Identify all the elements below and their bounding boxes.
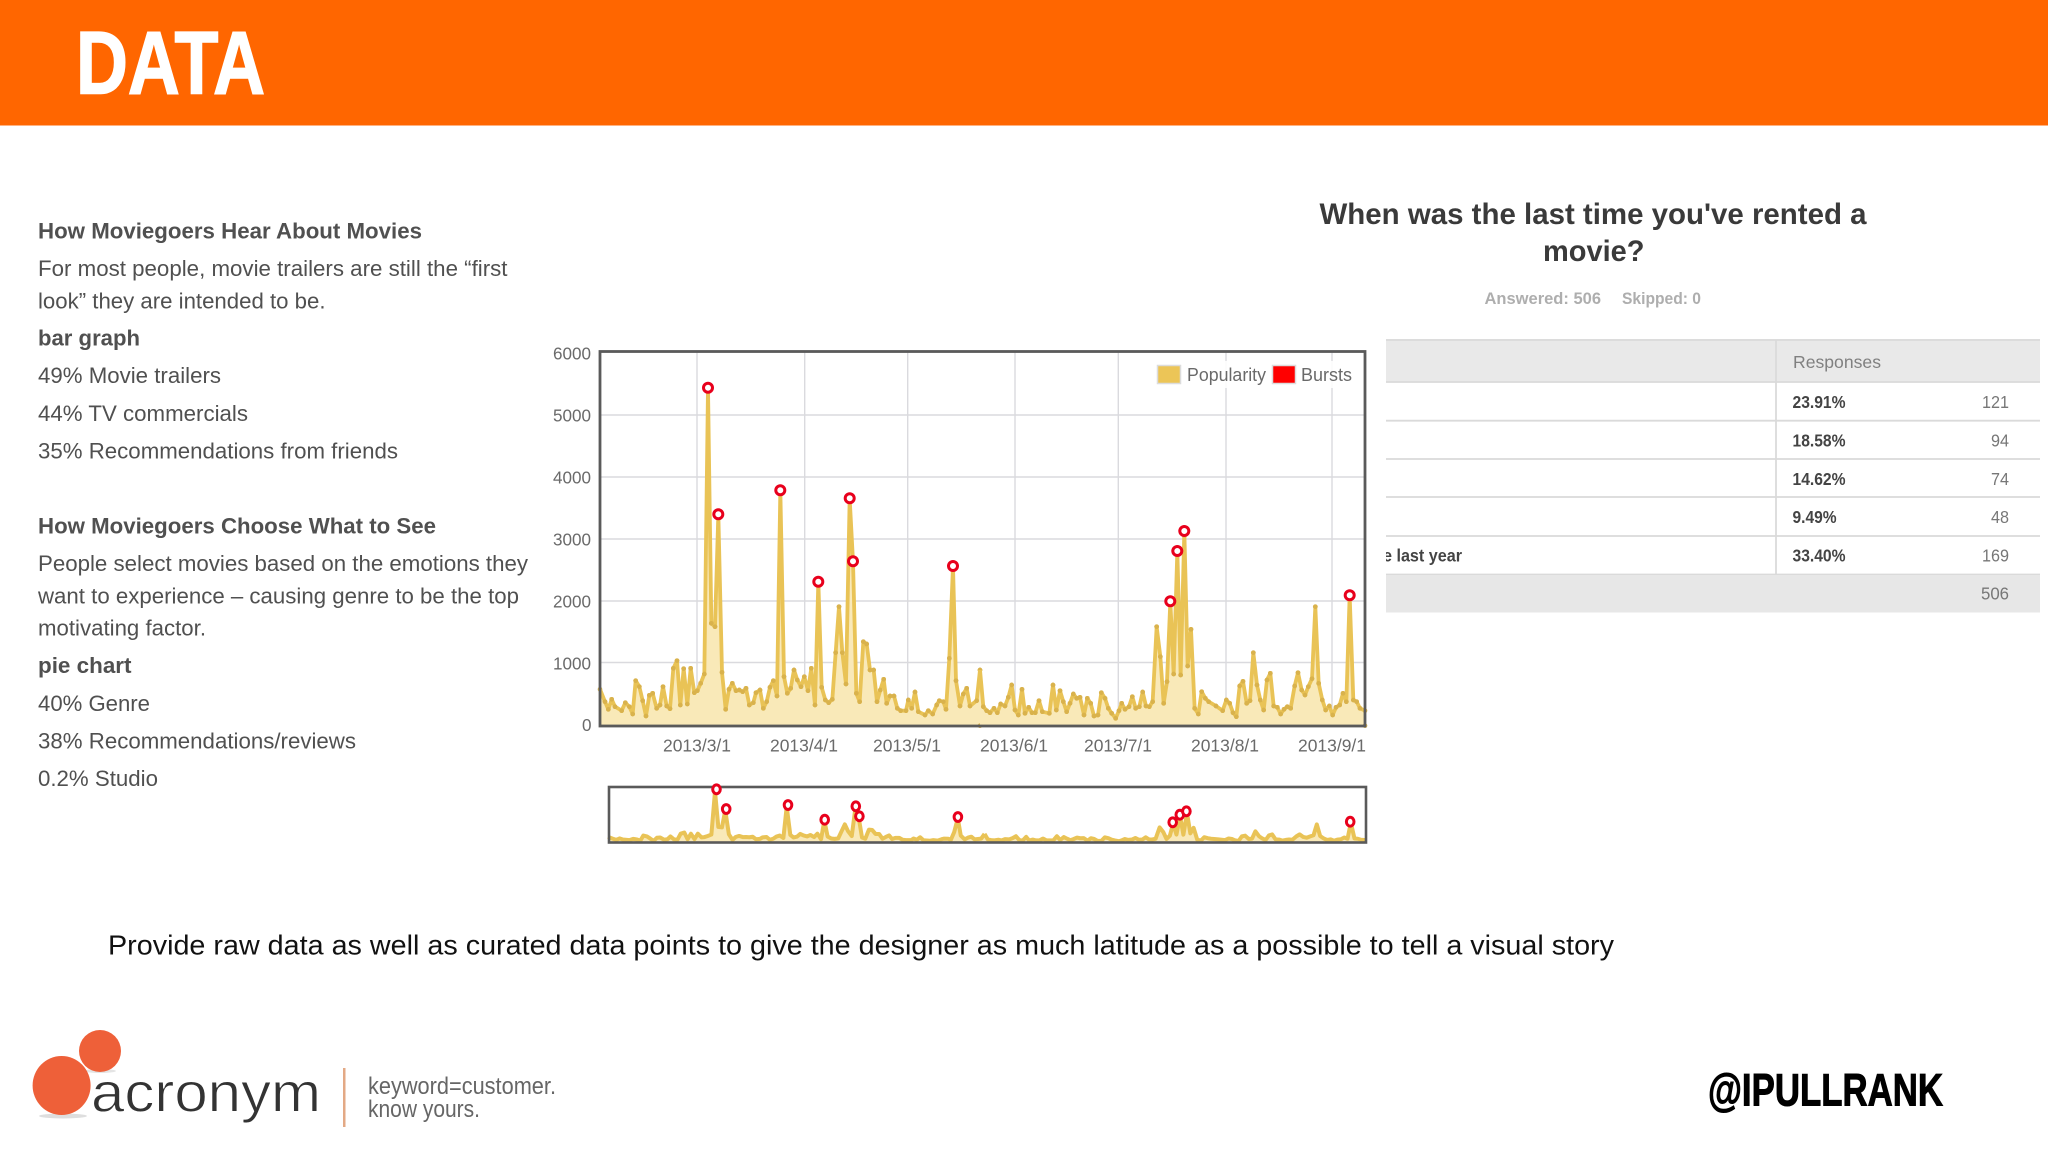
legend: Popularity bbox=[1187, 365, 1266, 385]
survey question heading: movie? bbox=[1543, 235, 1644, 268]
table row 3: 14.62% bbox=[1792, 469, 1846, 489]
table header row bbox=[1386, 339, 2040, 382]
bar graph data points: 35% Recommendations from friends bbox=[38, 438, 398, 464]
table row 5: e last year bbox=[1383, 546, 1462, 566]
survey answered and skipped counts bbox=[1484, 289, 1701, 308]
y axis labels: 2000 bbox=[553, 592, 591, 612]
overview frame bbox=[609, 787, 1366, 842]
overview burst markers bbox=[713, 785, 1354, 827]
pie chart data points: 0.2% Studio bbox=[38, 766, 158, 791]
table row 2: 18.58% bbox=[1792, 431, 1846, 451]
table footer row: 506 bbox=[1981, 584, 2009, 604]
description: motivating factor. bbox=[38, 616, 206, 641]
chart frame bbox=[600, 352, 1365, 726]
description: want to experience – causing genre to be the top bbox=[37, 583, 519, 608]
twitter handle: @IPULLRANK bbox=[1708, 1065, 1943, 1116]
logo wordmark: acronym bbox=[91, 1061, 321, 1124]
survey responses table bbox=[1383, 339, 2040, 612]
pie chart data points bbox=[38, 691, 356, 791]
x axis labels: 2013/3/1 bbox=[663, 736, 731, 756]
x axis labels: 2013/9/1 bbox=[1298, 736, 1366, 756]
table row 2: 94 bbox=[1991, 431, 2009, 451]
logo divider bbox=[343, 1068, 346, 1127]
line chart: popularity and bursts bbox=[553, 344, 1366, 756]
heading: How Moviegoers Hear About Movies bbox=[38, 218, 422, 244]
overview range chart bbox=[608, 785, 1366, 843]
title: DATA bbox=[76, 12, 265, 112]
heading: How Moviegoers Choose What to See bbox=[38, 514, 436, 538]
legend: Bursts bbox=[1301, 365, 1352, 385]
pie chart data points: 40% Genre bbox=[38, 691, 150, 716]
y axis labels: 1000 bbox=[553, 654, 591, 674]
acronym logo bbox=[33, 1030, 556, 1127]
logo tagline: keyword=customer. bbox=[368, 1073, 556, 1100]
table row 5: 33.40% bbox=[1792, 546, 1846, 566]
table row 1: 23.91% bbox=[1792, 392, 1846, 412]
description bbox=[38, 256, 508, 314]
panel: how moviegoers choose what to see bbox=[37, 514, 529, 791]
table row 5 bbox=[1386, 548, 2008, 565]
description: For most people, movie trailers are still the “first bbox=[38, 256, 508, 281]
table row 1 bbox=[1793, 396, 2008, 408]
table row 1: 121 bbox=[1982, 392, 2009, 412]
survey answered and skipped counts: Answered: 506 bbox=[1484, 289, 1601, 308]
bar graph data points bbox=[38, 363, 398, 464]
table footer row bbox=[1386, 575, 2040, 612]
description: People select movies based on the emotions they bbox=[38, 551, 529, 576]
survey question heading bbox=[1320, 198, 1867, 268]
burst markers bbox=[704, 383, 1354, 606]
x axis labels bbox=[663, 736, 1366, 756]
x axis labels: 2013/4/1 bbox=[770, 736, 838, 756]
bar graph data points: 44% TV commercials bbox=[38, 401, 248, 426]
y axis labels: 4000 bbox=[553, 468, 591, 488]
table header row: Responses bbox=[1793, 352, 1881, 372]
overview series bbox=[608, 791, 1366, 842]
bar graph data points: 49% Movie trailers bbox=[38, 363, 221, 388]
x axis labels: 2013/7/1 bbox=[1084, 736, 1152, 756]
x axis labels: 2013/6/1 bbox=[980, 736, 1048, 756]
table row 3 bbox=[1794, 473, 2008, 485]
description: look” they are intended to be. bbox=[38, 288, 326, 314]
x axis labels: 2013/5/1 bbox=[873, 736, 941, 756]
popularity series bbox=[600, 388, 1365, 726]
y axis labels: 3000 bbox=[553, 530, 591, 550]
icon: logo circles bbox=[33, 1030, 121, 1118]
survey answered and skipped counts: Skipped: 0 bbox=[1622, 289, 1701, 308]
table row 3: 74 bbox=[1991, 469, 2009, 489]
description bbox=[37, 551, 529, 641]
pie chart data points: 38% Recommendations/reviews bbox=[38, 728, 356, 753]
table row 4: 48 bbox=[1991, 507, 2009, 527]
logo tagline: know yours. bbox=[368, 1096, 480, 1123]
panel: how moviegoers hear about movies bbox=[38, 218, 508, 464]
subheading: bar graph: bar graph bbox=[38, 326, 140, 350]
y axis labels: 6000 bbox=[553, 344, 591, 364]
legend bbox=[1153, 361, 1356, 388]
table row 4 bbox=[1793, 511, 2008, 523]
subheading: pie chart: pie chart bbox=[38, 653, 132, 678]
logo tagline bbox=[368, 1073, 556, 1123]
x axis labels: 2013/8/1 bbox=[1191, 736, 1259, 756]
y axis labels bbox=[553, 344, 592, 735]
note about raw data: Provide raw data as well as curated data points to give the designer as much latitude as a possible to tell a visual story bbox=[108, 929, 1614, 960]
survey question heading: When was the last time you've rented a bbox=[1320, 198, 1867, 231]
header banner bbox=[0, 0, 2048, 126]
y axis labels: 0 bbox=[582, 715, 592, 735]
table row 5: 169 bbox=[1982, 546, 2009, 566]
table row 4: 9.49% bbox=[1792, 507, 1837, 527]
y axis labels: 5000 bbox=[553, 406, 591, 426]
table row 2 bbox=[1794, 434, 2008, 446]
